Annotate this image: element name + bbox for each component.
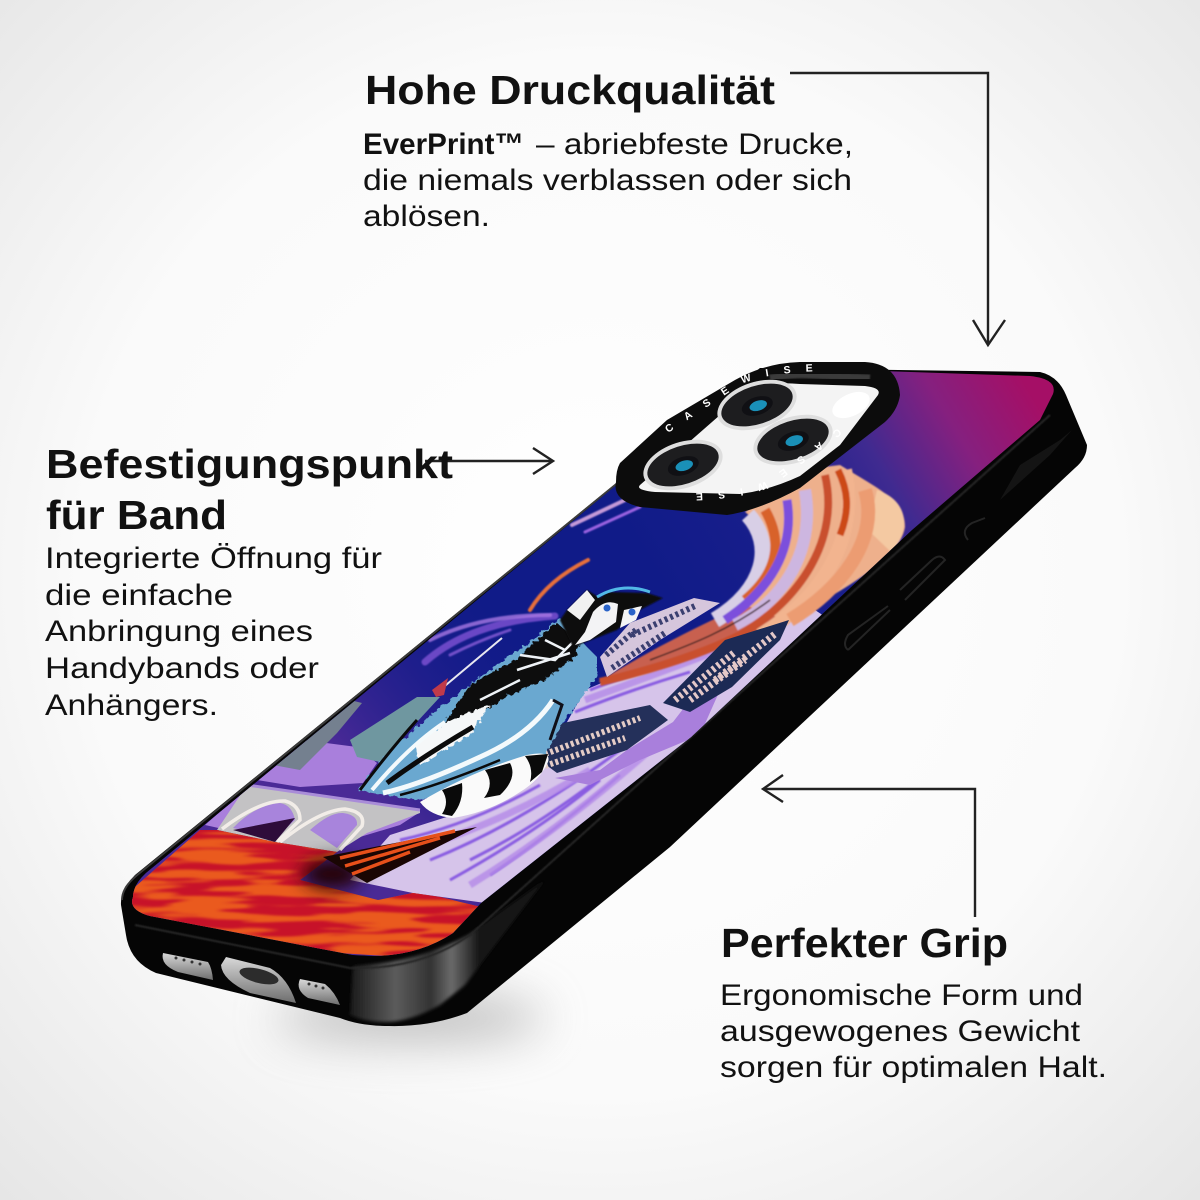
- text block: EverPrint: – abriebfeste Drucke,: [536, 128, 853, 161]
- ring lettering paths: [668, 371, 835, 433]
- eyes: [604, 604, 610, 612]
- water red streaks: [132, 830, 478, 956]
- red top of tower: [432, 678, 448, 697]
- glass window: [639, 383, 879, 494]
- purple flow: [350, 600, 830, 905]
- text block: Ergonomische Form: ausgewogenes Gewicht: [720, 1015, 1081, 1048]
- phone case: [120, 362, 1087, 1026]
- spire: [446, 637, 503, 686]
- lens left: [637, 430, 729, 500]
- dark tree canopy: [302, 827, 477, 889]
- hair swirl: [598, 465, 905, 682]
- sky gradient: [132, 371, 1054, 956]
- text block: EverPrint: die niemals verblassen oder sich: [363, 164, 852, 197]
- ring lettering lower path: [675, 428, 838, 494]
- text block: EverPrint: ablösen.: [363, 200, 490, 233]
- left building: [273, 700, 362, 770]
- left speaker: [163, 953, 213, 980]
- arrow: middle: [425, 448, 553, 474]
- upper building: [600, 598, 720, 677]
- white belly blob: [415, 705, 490, 765]
- text block: Ergonomische Form: Ergonomische Form und: [720, 979, 1083, 1012]
- side highlight at corner: [350, 880, 545, 1022]
- bottom ports: [163, 953, 340, 1005]
- right speaker: [299, 979, 340, 1005]
- text block: Ergonomische Form: [720, 979, 1107, 1084]
- dark under arch wedge: [233, 818, 295, 842]
- printed artwork: [132, 371, 1054, 956]
- lemur: [357, 588, 663, 818]
- body fur: [357, 618, 597, 800]
- side buttons: [845, 430, 1072, 650]
- orange water: [120, 830, 485, 960]
- ring lettering top: CASEWISE: [666, 364, 812, 432]
- arrow: top: [790, 73, 1005, 345]
- heading: Befestigungspunkt: Befestigungspunkt: [46, 441, 453, 487]
- text block: EverPrint: EverPrint™: [363, 128, 524, 161]
- heading: Befestigungspunkt: [46, 441, 453, 538]
- streak accents: [425, 500, 640, 662]
- text block: Integrierte Öffnung: [45, 542, 382, 722]
- heading: Hohe Druckqualität: Hohe Druckqualität: [365, 67, 775, 113]
- bump ring: [616, 362, 900, 515]
- side lip line: [135, 415, 1050, 968]
- left rim line: [122, 481, 620, 900]
- text block: EverPrint: [363, 128, 853, 233]
- text block: Integrierte Öffnung: Anbringung eines: [45, 615, 313, 648]
- ring lettering bottom: CASEWISE: [696, 430, 840, 500]
- phone drop shadow: [275, 994, 545, 1042]
- head: [560, 590, 663, 647]
- text block: Integrierte Öffnung: Handybands oder: [45, 652, 319, 685]
- arrow: lower: [763, 775, 975, 917]
- text block: Integrierte Öffnung: Integrierte Öffnung für: [45, 542, 382, 575]
- ring top band: [770, 375, 870, 378]
- text block: Integrierte Öffnung: die einfache: [45, 579, 233, 612]
- lower dark building: [663, 620, 789, 712]
- text block: Ergonomische Form: sorgen für optimalen Halt.: [720, 1051, 1107, 1084]
- case body: [121, 368, 1087, 1026]
- skyline tower: [350, 697, 440, 762]
- lens top: [711, 370, 803, 440]
- white chest lines: [480, 640, 575, 700]
- third building: [546, 705, 668, 773]
- lens right: [747, 405, 839, 475]
- heading: Perfekter Grip: Perfekter Grip: [721, 920, 1008, 966]
- leg lines: [360, 720, 417, 790]
- bridge: [217, 785, 420, 852]
- tail rings: [442, 754, 548, 816]
- charging port: [221, 957, 296, 1003]
- lavender shrubs: [205, 690, 720, 840]
- tail: [420, 754, 549, 818]
- camera bump: [616, 362, 900, 515]
- text block: Integrierte Öffnung: Anhängers.: [45, 689, 218, 722]
- heading: Befestigungspunkt: für Band: [46, 492, 227, 538]
- black chest patch: [440, 623, 580, 730]
